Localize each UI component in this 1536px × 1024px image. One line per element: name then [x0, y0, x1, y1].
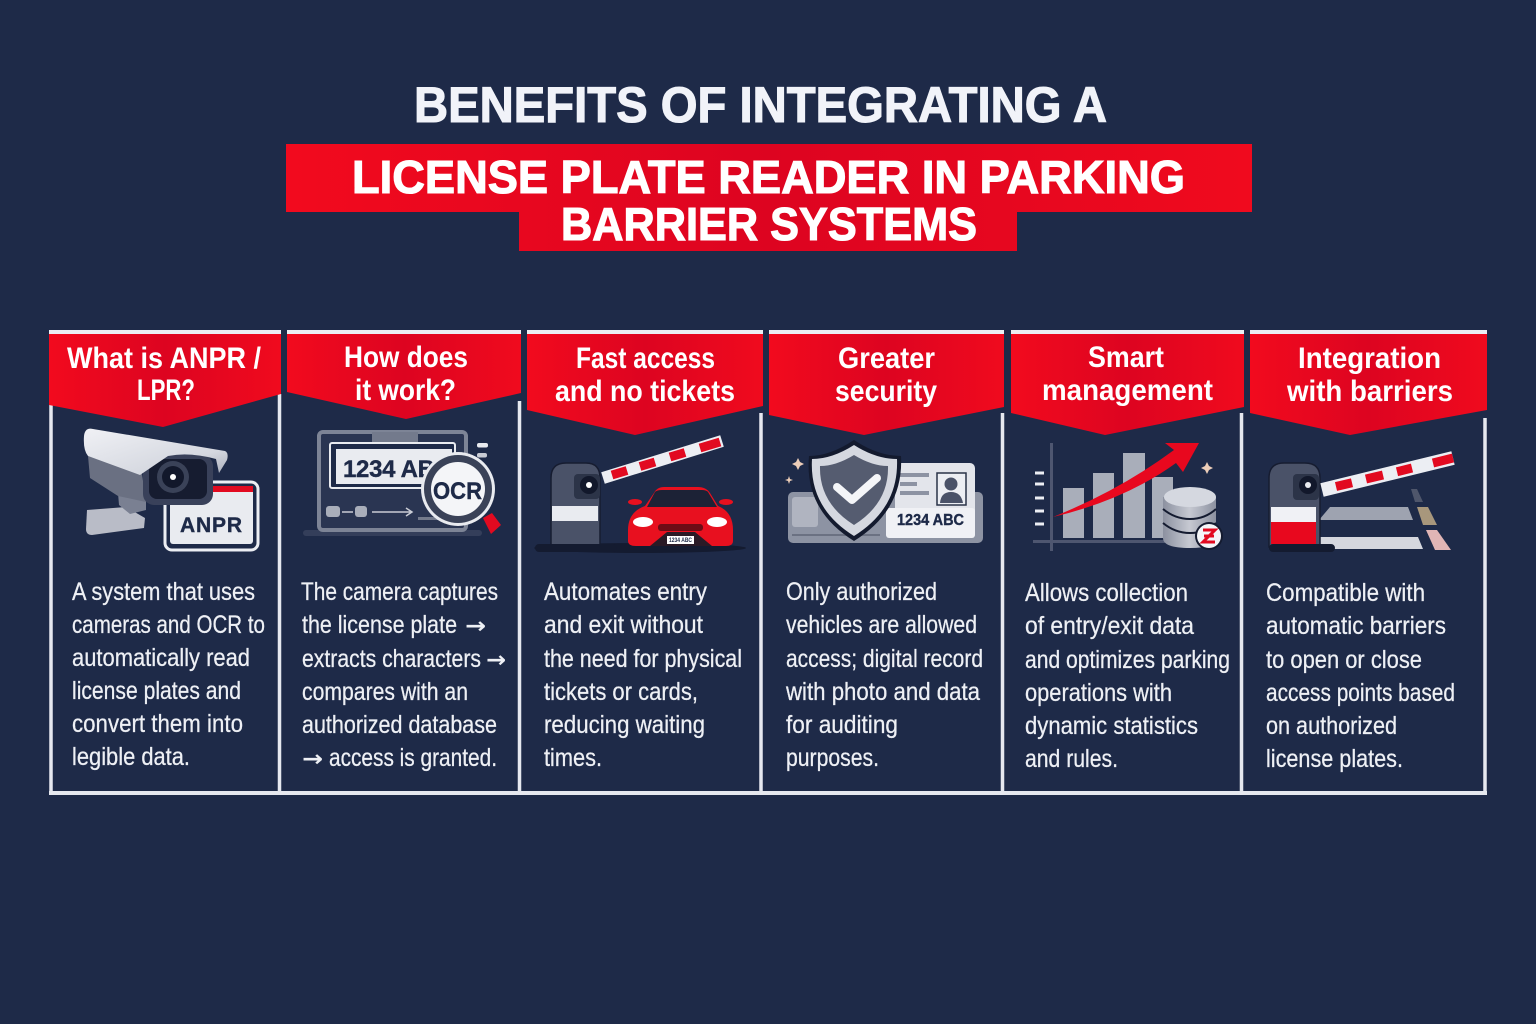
- description: smart management: Allows collection: [1025, 579, 1188, 607]
- description: greater security: access; digital record: [786, 645, 983, 673]
- header: smart management: Smart: [1088, 341, 1164, 374]
- description: integration with barriers: on authorized: [1266, 712, 1397, 740]
- description: how does it work: [301, 578, 506, 772]
- header: greater security: security: [835, 375, 937, 408]
- icon: shield and ID card: [785, 440, 983, 543]
- header: integration with barriers: [1250, 334, 1487, 435]
- description: fast access: times.: [544, 744, 602, 772]
- description: greater security: vehicles are allowed: [786, 611, 977, 639]
- description: integration with barriers: automatic barriers: [1266, 612, 1446, 640]
- title ribbon: BARRIER SYSTEMS: [561, 198, 977, 250]
- description: greater security: for auditing: [786, 711, 898, 739]
- icon: camera with ANPR card: ANPR: [180, 514, 242, 537]
- description: what is ANPR: automatically read: [72, 644, 250, 672]
- header: greater security: [769, 334, 1004, 435]
- description: greater security: with photo and data: [785, 678, 980, 706]
- description: fast access: and exit without: [544, 611, 703, 639]
- header: what is ANPR: What is ANPR /: [67, 342, 262, 375]
- description: fast access: tickets or cards,: [544, 678, 698, 706]
- description: how does it work: The camera captures: [301, 578, 498, 606]
- header: fast access: [527, 334, 763, 435]
- description: how does it work: →: [465, 614, 486, 639]
- panel: fast access: [527, 330, 763, 793]
- header: how does it work: How does: [344, 341, 468, 374]
- header: smart management: [1011, 334, 1244, 435]
- description: integration with barriers: to open or close: [1266, 646, 1422, 674]
- description: smart management: [1025, 579, 1230, 773]
- panel: what is ANPR: [49, 330, 281, 793]
- description: what is ANPR: [72, 578, 265, 771]
- header: what is ANPR: [49, 334, 281, 427]
- description: smart management: of entry/exit data: [1025, 612, 1194, 640]
- description: smart management: and rules.: [1025, 745, 1118, 773]
- description: greater security: Only authorized: [786, 578, 937, 606]
- icon: barrier with road lanes: [1269, 458, 1453, 552]
- icon: barrier and red car: 1234 ABC: [669, 538, 693, 544]
- description: fast access: reducing waiting: [544, 711, 705, 739]
- icon: OCR screen and magnifier: 1234 AB: [343, 456, 435, 483]
- icon: bar chart with arrow and database: [1033, 443, 1223, 551]
- header: fast access: and no tickets: [555, 375, 735, 408]
- description: fast access: Automates entry: [544, 578, 707, 606]
- panel: greater security: [769, 330, 1004, 793]
- description: smart management: and optimizes parking: [1025, 646, 1230, 674]
- description: fast access: the need for physical: [544, 645, 742, 673]
- description: how does it work: →: [486, 648, 506, 673]
- description: integration with barriers: license plates.: [1266, 745, 1403, 773]
- description: smart management: dynamic statistics: [1025, 712, 1198, 740]
- header: integration with barriers: Integration: [1298, 342, 1441, 375]
- title ribbon: LICENSE PLATE READER IN PARKING: [352, 151, 1185, 203]
- panel: integration with barriers: [1250, 330, 1487, 793]
- header: what is ANPR: LPR?: [137, 374, 195, 407]
- description: smart management: operations with: [1025, 679, 1172, 707]
- icon: OCR screen and magnifier: [303, 432, 501, 536]
- icon: shield and ID card: 1234 ABC: [897, 512, 964, 529]
- description: what is ANPR: legible data.: [72, 743, 190, 771]
- description: how does it work: →: [302, 747, 323, 772]
- header: integration with barriers: with barriers: [1286, 375, 1453, 408]
- icon: OCR screen and magnifier: OCR: [433, 478, 482, 505]
- description: what is ANPR: A system that uses: [72, 578, 255, 606]
- description: how does it work: access is granted.: [329, 744, 497, 772]
- description: what is ANPR: convert them into: [72, 710, 243, 738]
- header: smart management: management: [1042, 374, 1213, 407]
- title ribbon: [286, 144, 1252, 251]
- header: greater security: Greater: [838, 342, 935, 375]
- description: integration with barriers: [1266, 579, 1455, 773]
- description: integration with barriers: Compatible with: [1266, 579, 1425, 607]
- description: how does it work: compares with an: [302, 678, 468, 706]
- description: what is ANPR: license plates and: [72, 677, 241, 705]
- description: greater security: purposes.: [786, 744, 879, 772]
- panel: smart management: [1011, 330, 1244, 793]
- description: what is ANPR: cameras and OCR to: [72, 611, 265, 639]
- header: fast access: Fast access: [576, 342, 715, 375]
- description: greater security: [785, 578, 983, 772]
- header: how does it work: [287, 334, 521, 419]
- header: how does it work: it work?: [355, 374, 456, 407]
- description: how does it work: authorized database: [302, 711, 497, 739]
- description: how does it work: extracts characters: [302, 645, 481, 673]
- description: how does it work: the license plate: [302, 611, 457, 639]
- description: fast access: [544, 578, 742, 772]
- title: BENEFITS OF INTEGRATING A: [414, 77, 1107, 133]
- panel: how does it work: [287, 330, 521, 793]
- icon: barrier and red car: [534, 441, 746, 553]
- icon: camera with ANPR card: [84, 429, 258, 550]
- description: integration with barriers: access points based: [1266, 679, 1455, 707]
